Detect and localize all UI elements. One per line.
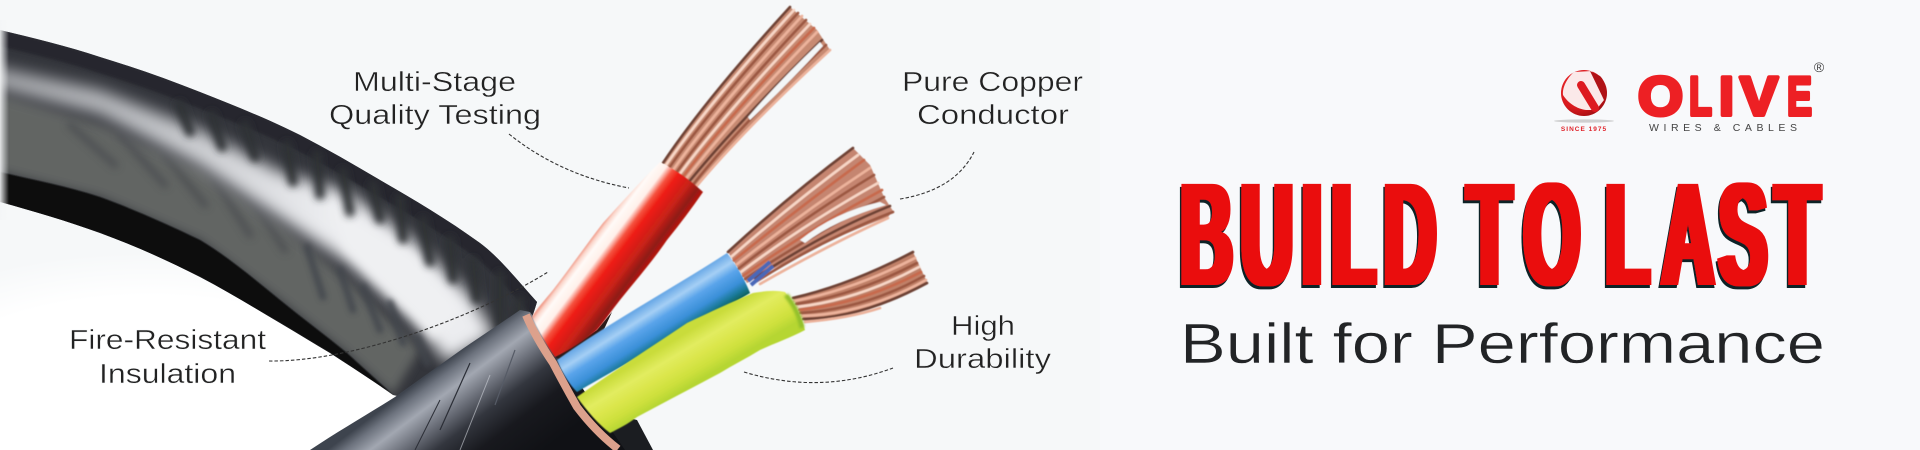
label: high durability: High [951,310,1015,341]
logo registered mark: ® [1814,59,1825,75]
logo since 1975: SINCE 1975 [1561,126,1607,133]
label: pure copper conductor [902,66,1083,130]
logo wordmark: V [1740,65,1778,127]
highlight band [0,66,495,362]
label: high durability [914,310,1051,374]
green wire [577,252,927,433]
lower black edge [0,172,393,395]
leader line: high durability [744,368,893,383]
logo wordmark: I [1719,65,1734,127]
coiled black cable [0,30,537,396]
label: multi-stage quality testing [329,66,541,130]
label: multi-stage quality testing: Quality Testing [329,99,541,130]
grey middle band [0,95,420,395]
label: fire-resistant insulation [69,324,266,389]
lower feather streaks [307,247,427,363]
red wire copper strands [663,7,830,188]
green wire copper strands [793,252,927,322]
title: BUILD TO LAST [1181,152,1820,317]
label: fire-resistant insulation: Insulation [99,358,236,389]
left middle streaks [70,125,285,250]
logo [1554,59,1825,134]
logo wordmark: L [1689,65,1712,127]
upper dark edge [0,38,537,310]
blue wire copper strands [728,148,893,285]
label: multi-stage quality testing: Multi-Stage [353,66,516,97]
leader line: fire-resistant insulation [269,272,548,361]
shadow between red and blue wires [555,312,612,362]
logo wordmark: O [1638,65,1683,127]
logo wordmark [1638,65,1812,127]
blue wire insulation [557,253,750,392]
logo wordmark: E [1787,65,1812,127]
copper inner ring [526,315,618,449]
upper feather streaks [180,105,520,340]
blue wire [557,148,893,392]
logo icon [1554,70,1614,123]
label: pure copper conductor: Pure Copper [902,66,1083,97]
red wire [532,7,830,357]
logo tagline: WIRES & CABLES [1649,122,1797,134]
left edge fade [0,20,9,220]
leader line: pure copper conductor [900,152,974,199]
leader line: multi-stage quality testing [509,134,629,188]
green wire insulation [577,291,805,433]
cable end, black outer sheath [310,310,653,450]
subtitle: Built for Performance [1180,312,1825,376]
label: high durability: Durability [914,343,1051,374]
label: pure copper conductor: Conductor [917,99,1069,130]
label: fire-resistant insulation: Fire-Resistant [69,324,266,355]
red wire insulation [532,162,703,357]
